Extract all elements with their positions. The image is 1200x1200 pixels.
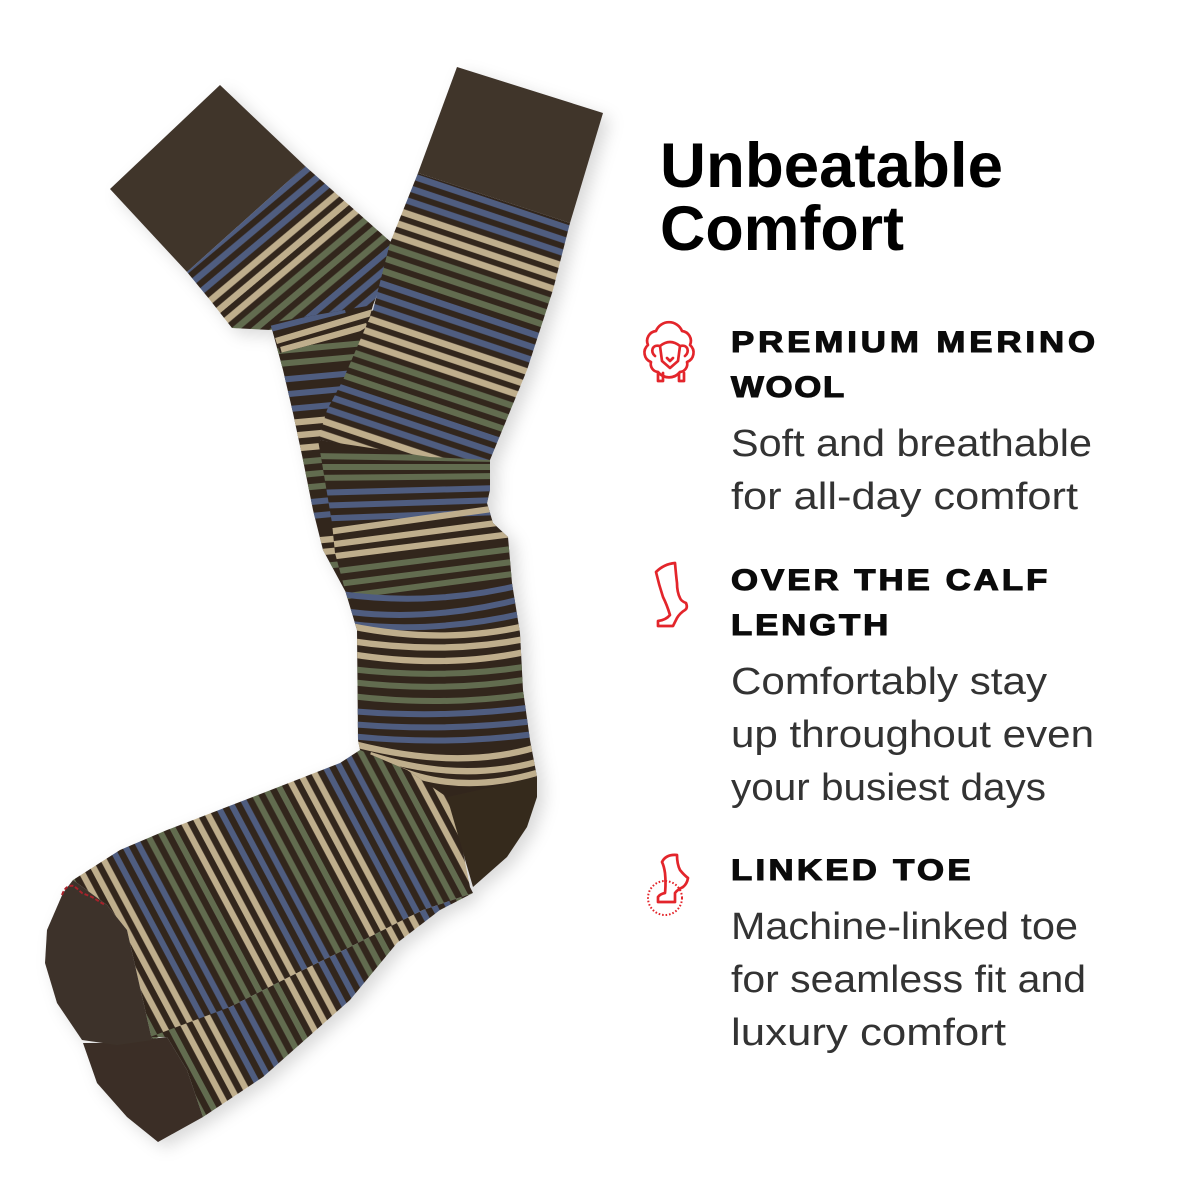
photo: pair of striped over-the-calf socks <box>45 67 603 1142</box>
back sock: narrow strip of leg behind the fold <box>273 310 373 592</box>
title: Comfort <box>660 194 904 264</box>
back sock: twisted fold <box>270 305 373 353</box>
feature: premium merino wool: WOOL <box>731 370 844 403</box>
feature: linked toe: Machine-linked toe <box>731 906 1078 948</box>
leg panel with horizontal stripes <box>310 435 545 805</box>
icon: over the calf leg <box>656 563 687 626</box>
heel <box>445 777 537 887</box>
back sock: striped upper leg <box>187 166 392 330</box>
icon: sheep <box>644 322 694 381</box>
feature: premium merino wool: PREMIUM MERINO <box>731 325 1095 358</box>
back sock: cuff <box>110 85 305 272</box>
feature: premium merino wool <box>731 325 1095 518</box>
feature: linked toe: LINKED TOE <box>731 853 971 886</box>
feature: linked toe: for seamless fit and <box>731 959 1086 1001</box>
feature: over the calf length <box>731 563 1094 809</box>
lower foot: toe <box>83 1037 203 1142</box>
top foot: toe <box>45 880 152 1045</box>
front sock: cuff <box>418 67 603 223</box>
title: Unbeatable <box>660 131 1003 201</box>
feature: premium merino wool: for all-day comfort <box>731 476 1079 518</box>
feature: linked toe <box>731 853 1086 1054</box>
feature: over the calf length: LENGTH <box>731 608 888 641</box>
lower foot: stripes <box>150 893 473 1117</box>
icon: linked toe <box>648 855 688 915</box>
feature: over the calf length: OVER THE CALF <box>731 563 1047 596</box>
title <box>660 131 1003 264</box>
feature: over the calf length: Comfortably stay <box>731 661 1047 703</box>
front sock: striped leg <box>318 173 570 460</box>
feature: over the calf length: up throughout even <box>731 714 1094 756</box>
feature: linked toe: luxury comfort <box>731 1012 1006 1054</box>
feature: over the calf length: your busiest days <box>731 767 1046 809</box>
feature: premium merino wool: Soft and breathable <box>731 423 1092 465</box>
top foot: stripes <box>73 750 473 1040</box>
red toe stitching <box>62 886 105 905</box>
